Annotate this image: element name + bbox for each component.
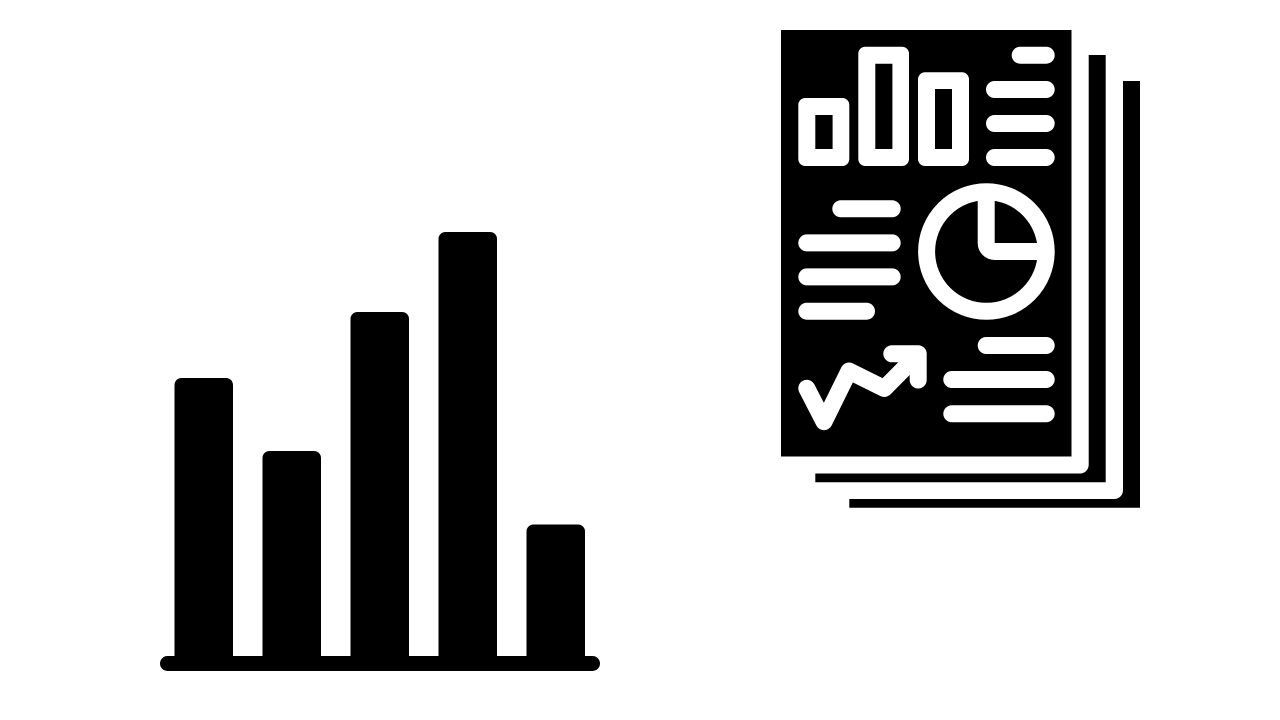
bar 3: [350, 312, 409, 660]
top right text lines: [986, 47, 1055, 166]
baseline: [160, 656, 600, 671]
front page: [781, 30, 1072, 456]
back page 2: [815, 55, 1106, 482]
middle left text lines: [798, 200, 901, 320]
mini bar 3: [918, 72, 969, 166]
pie chart: [927, 192, 1046, 311]
mini bar chart: [798, 47, 969, 166]
bar 2: [262, 451, 321, 660]
icon: stacked report pages: [781, 30, 1140, 508]
bar 4: [438, 232, 497, 660]
bar 5: [526, 524, 585, 660]
bottom right text lines: [943, 337, 1055, 422]
mini bar 1: [798, 98, 849, 166]
mini bar 2: [858, 47, 909, 166]
back page 3: [849, 81, 1140, 508]
icon: bar chart: [160, 232, 600, 671]
trend arrow: [807, 354, 918, 422]
bar 1: [174, 378, 233, 660]
